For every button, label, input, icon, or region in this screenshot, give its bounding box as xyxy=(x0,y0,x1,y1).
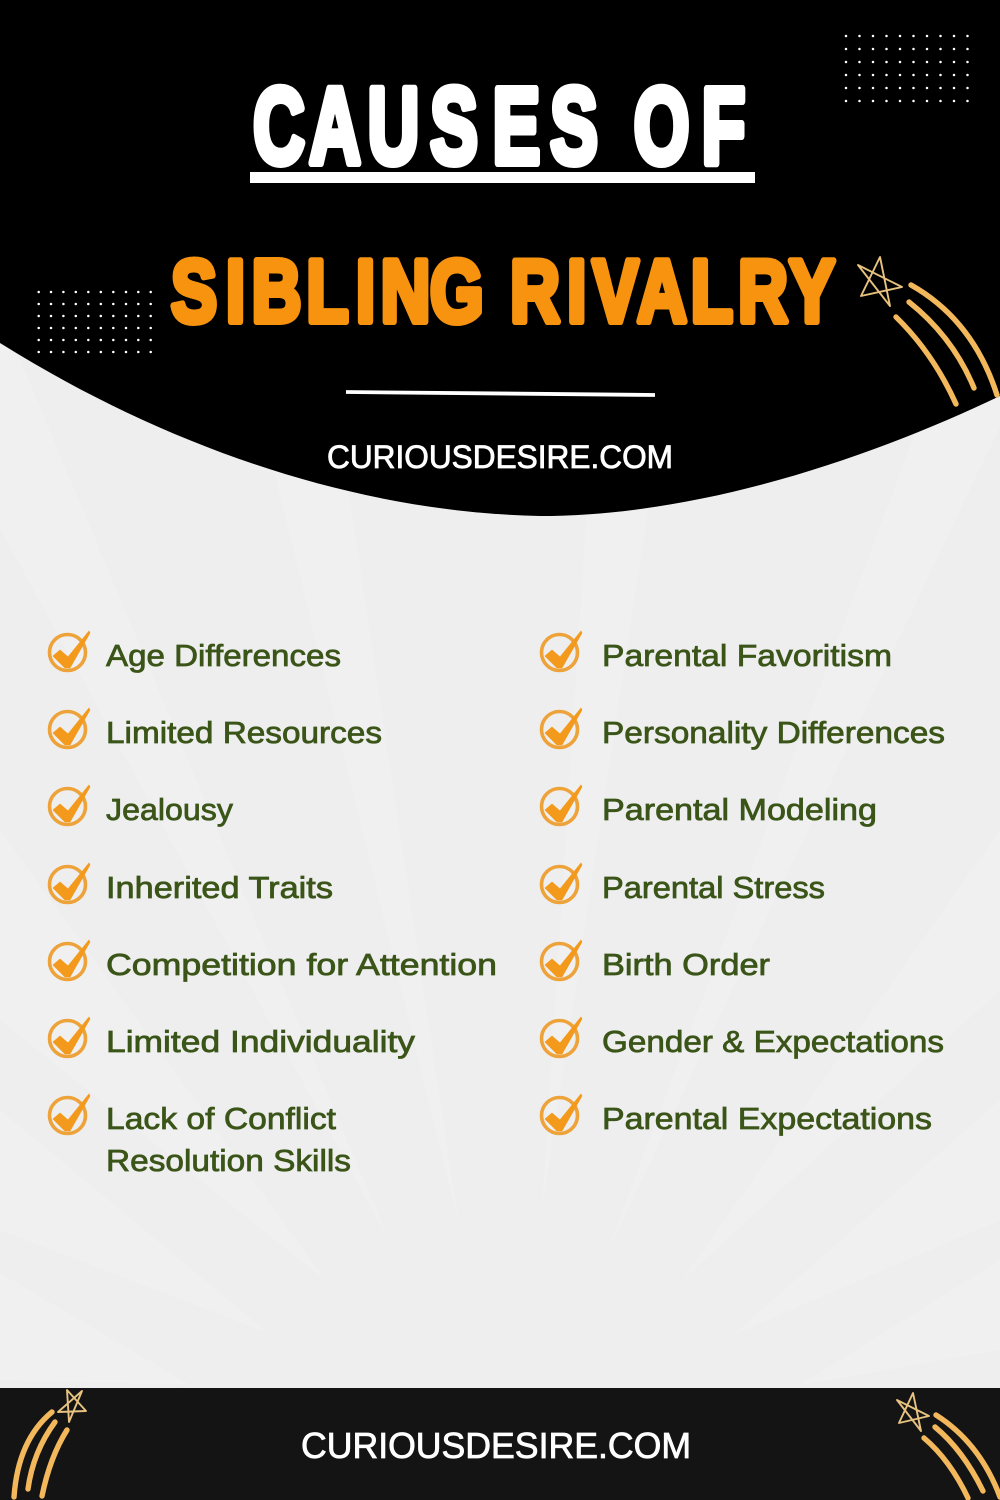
title: causes of: CAUSES OF xyxy=(253,66,745,187)
item: lack of conflict resolution skills: Resolution Skills xyxy=(106,1144,351,1178)
item: parental favoritism: Parental Favoritism xyxy=(602,639,892,673)
item: jealousy xyxy=(50,785,234,827)
item: parental expectations: Parental Expectations xyxy=(602,1102,932,1136)
dot grid left xyxy=(39,292,151,352)
dot grid top right xyxy=(846,36,968,101)
item: inherited traits: Inherited Traits xyxy=(106,871,333,905)
item: parental stress xyxy=(542,863,825,905)
item: jealousy: Jealousy xyxy=(106,793,234,827)
item: parental modeling: Parental Modeling xyxy=(602,793,877,827)
footer bar xyxy=(0,1388,1000,1500)
item: parental modeling xyxy=(542,785,877,827)
background rays xyxy=(0,300,1000,1385)
item: limited individuality xyxy=(50,1017,416,1059)
item: parental expectations xyxy=(542,1094,932,1136)
item: competition for attention xyxy=(50,940,497,982)
left checklist column xyxy=(50,631,497,1178)
item: personality differences xyxy=(542,708,945,750)
item: birth order: Birth Order xyxy=(602,948,770,982)
right checklist column xyxy=(542,631,945,1136)
icon: shooting star top right xyxy=(858,257,997,404)
header website text: CURIOUSDESIRE.COM xyxy=(327,439,673,475)
item: birth order xyxy=(542,940,770,982)
item: personality differences: Personality Differences xyxy=(602,716,945,750)
item: parental stress: Parental Stress xyxy=(602,871,825,905)
item: age differences: Age Differences xyxy=(106,639,341,673)
item: limited resources: Limited Resources xyxy=(106,716,382,750)
item: gender and expectations xyxy=(542,1017,944,1059)
icon: shooting star footer left xyxy=(14,1390,86,1497)
item: limited individuality: Limited Individuality xyxy=(106,1025,416,1059)
item: gender and expectations: Gender & Expectations xyxy=(602,1025,944,1059)
footer website text: CURIOUSDESIRE.COM xyxy=(301,1425,691,1466)
item: lack of conflict resolution skills xyxy=(50,1094,351,1178)
item: lack of conflict resolution skills: Lack of Conflict xyxy=(106,1102,337,1136)
item: age differences xyxy=(50,631,341,673)
title underline xyxy=(250,172,755,183)
title: sibling rivalry: SIBLING RIVALRY xyxy=(171,242,835,340)
item: parental favoritism xyxy=(542,631,892,673)
item: inherited traits xyxy=(50,863,333,905)
header divider line xyxy=(346,392,655,395)
item: limited resources xyxy=(50,708,382,750)
header black curved panel xyxy=(0,0,1000,516)
item: competition for attention: Competition for Attention xyxy=(106,948,497,982)
icon: shooting star footer right xyxy=(897,1393,1000,1498)
